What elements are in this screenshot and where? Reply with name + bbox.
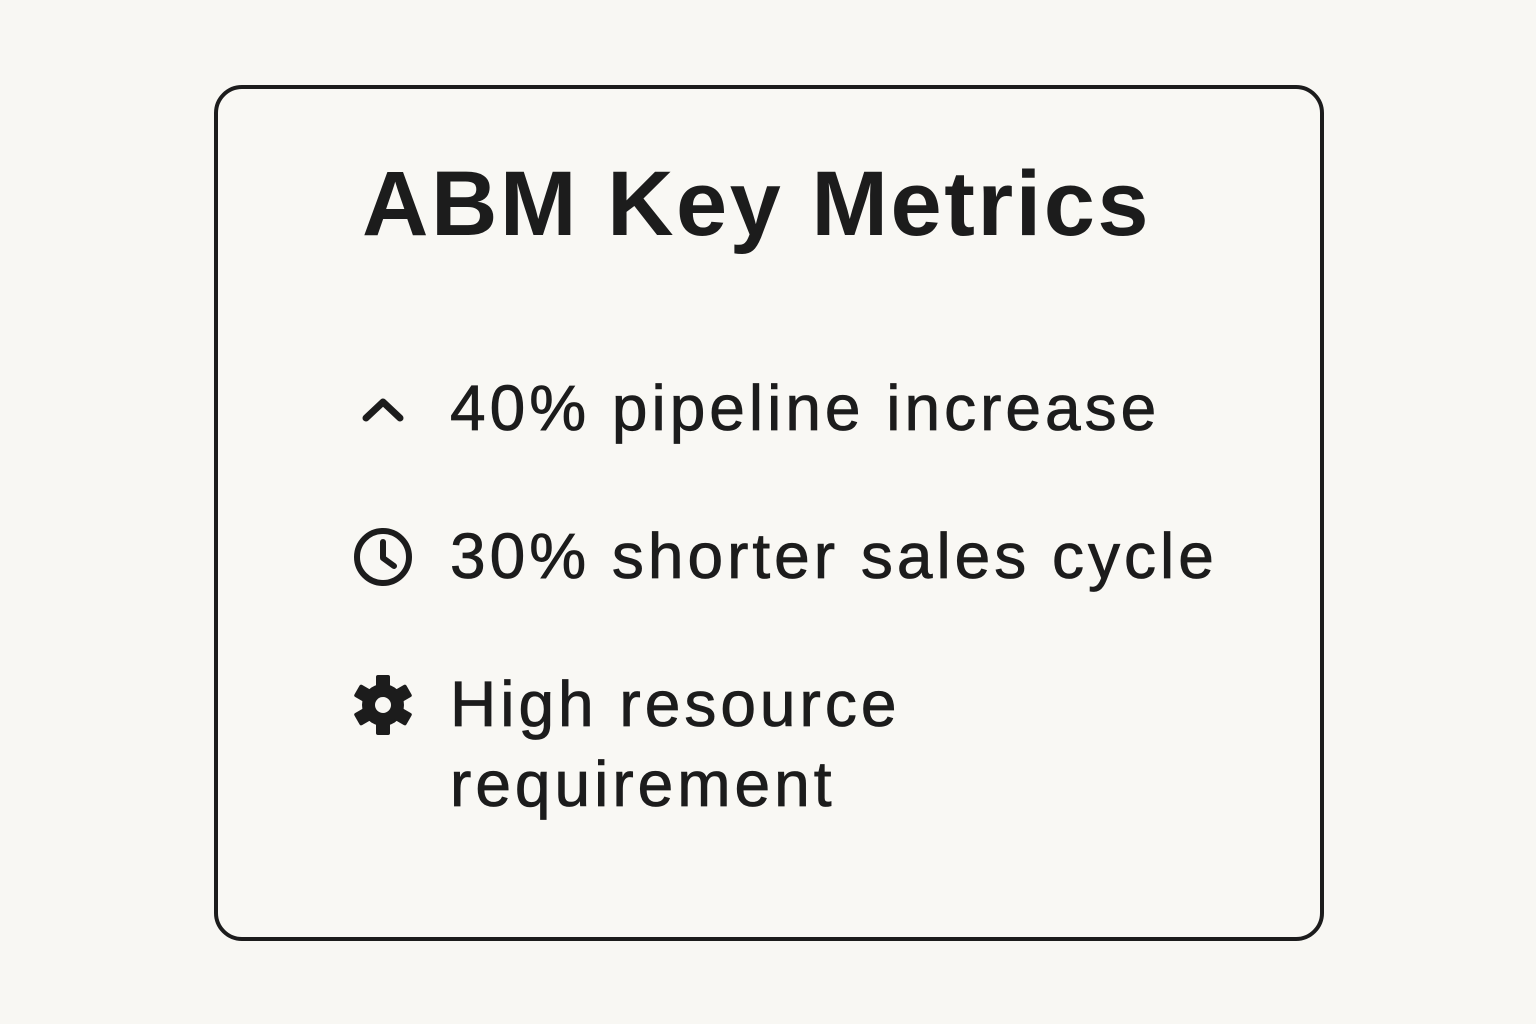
metric: pipeline increase: 40% pipeline increase <box>450 372 1160 444</box>
title: ABM Key Metrics <box>362 153 1151 255</box>
metric: high resource requirement: requirement <box>450 748 836 820</box>
metric: shorter sales cycle: 30% shorter sales cycle <box>450 520 1218 592</box>
icon: gear <box>354 675 412 735</box>
card panel <box>214 85 1324 941</box>
icon: clock <box>354 528 412 586</box>
icon: chevron up <box>362 398 404 422</box>
metric: high resource requirement <box>450 668 900 820</box>
metric: high resource requirement: High resource <box>450 668 900 740</box>
